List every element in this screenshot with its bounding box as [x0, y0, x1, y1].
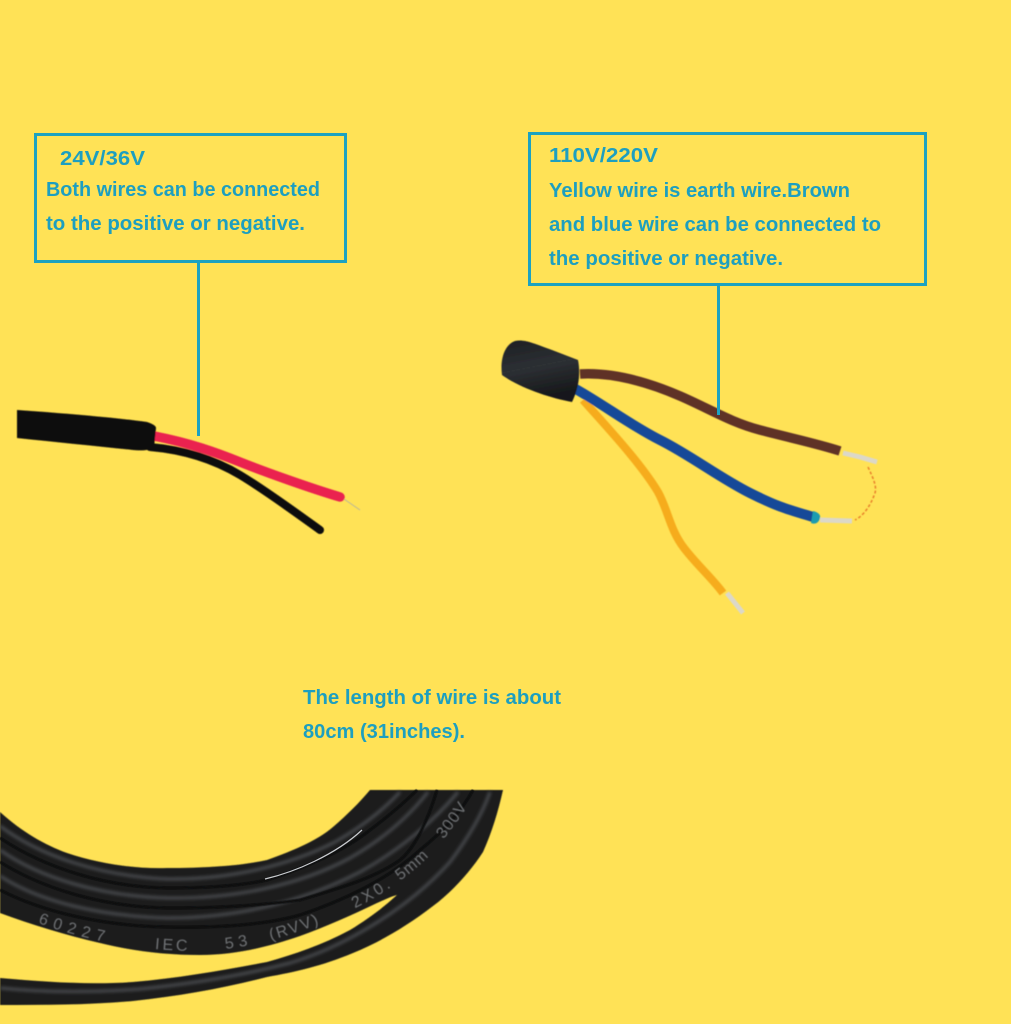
- callout: 110V/220V: and blue wire can be connected to: [549, 214, 881, 236]
- coiled black cable photo: [0, 788, 504, 1006]
- callout: 110V/220V: Yellow wire is earth wire.Brown: [549, 180, 850, 202]
- callout: 24V/36V: to the positive or negative.: [46, 213, 305, 235]
- cable highlights: [0, 792, 490, 992]
- wire length note: [303, 687, 561, 743]
- two-core wire photo: [17, 410, 360, 530]
- callout: 24V/36V: Both wires can be connected: [46, 179, 320, 201]
- callout: 24V/36V: 24V/36V: [60, 148, 146, 170]
- callout: 24V/36V: [36, 134, 346, 262]
- cable separators: [0, 790, 473, 927]
- callout: 110V/220V: the positive or negative.: [549, 248, 783, 270]
- leader line: 110V/220V: [717, 286, 720, 415]
- glint: [265, 830, 362, 879]
- main coil: [0, 790, 503, 1005]
- three-core wire photo: [502, 341, 877, 613]
- callout: 110V/220V: 110V/220V: [549, 145, 659, 167]
- wire length note: 80cm (31inches).: [303, 721, 465, 743]
- leader line: 24V/36V: [197, 263, 200, 436]
- wire length note: The length of wire is about: [303, 687, 561, 709]
- printed cable marking: 60227 IEC 53 (RVV) 2X0.5mm300V: [39, 800, 465, 952]
- callout: 110V/220V: [530, 134, 926, 284]
